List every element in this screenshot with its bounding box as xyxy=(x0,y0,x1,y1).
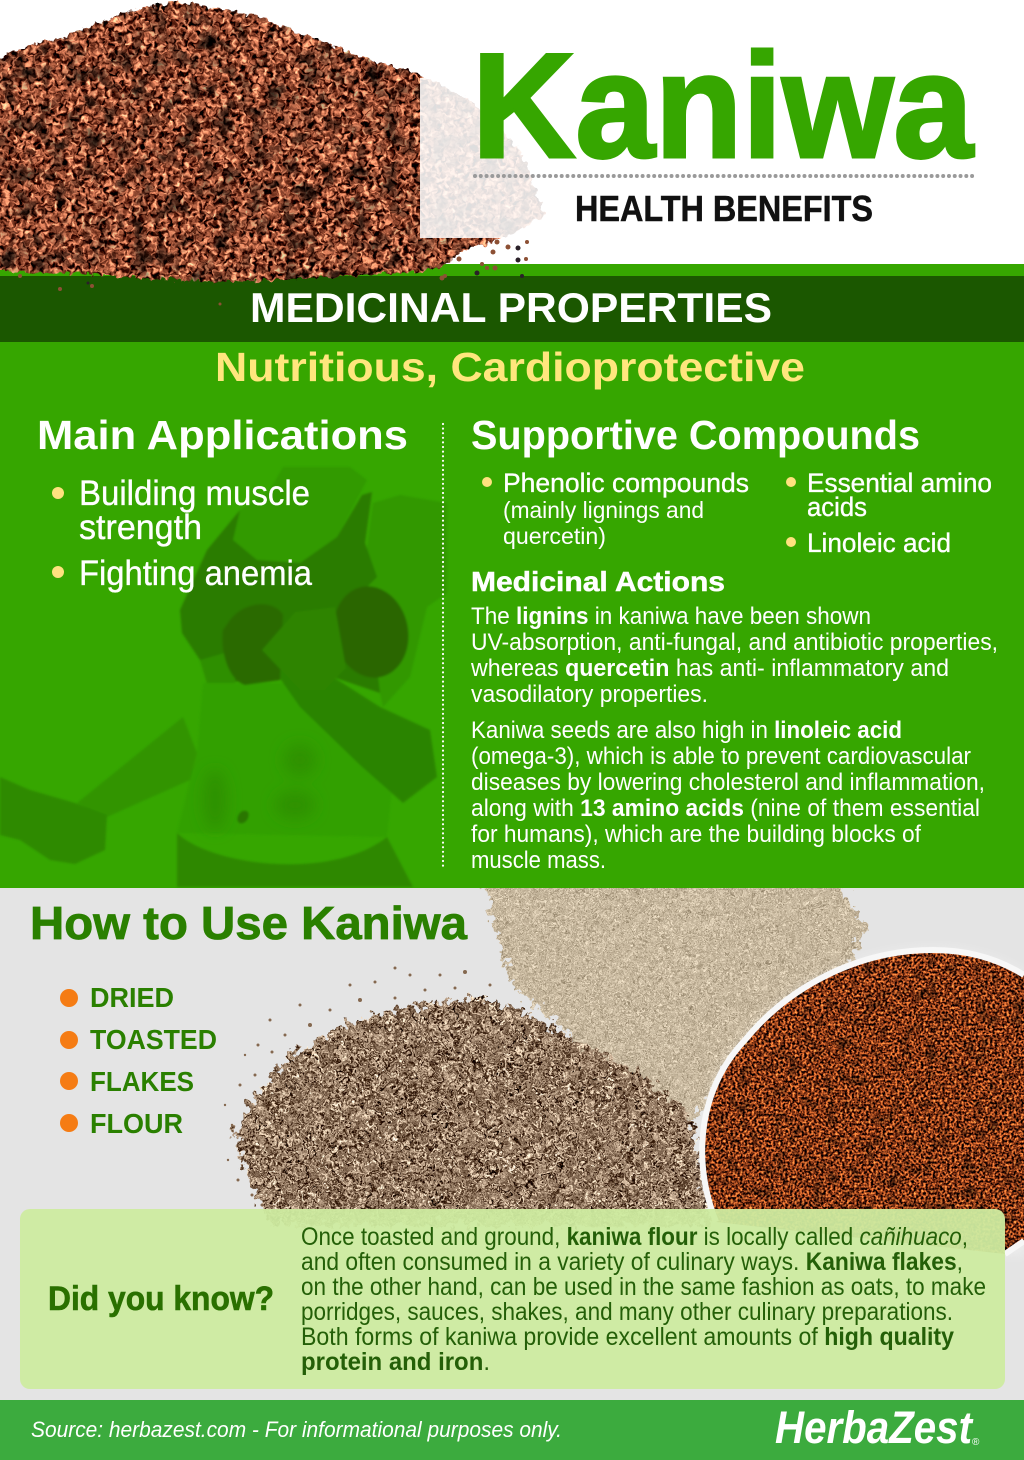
list item: essential amino acids: Essential amino xyxy=(807,468,992,498)
list item: essential amino acids: acids xyxy=(807,492,867,522)
list item: phenolic compounds: quercetin) xyxy=(503,523,606,549)
list item: phenolic compounds: (mainly lignings and xyxy=(503,497,704,523)
image: kaniwa seed pile xyxy=(0,0,546,306)
paragraph: lignins and quercetin: whereas quercetin has anti- inflammatory and xyxy=(470,655,949,682)
list item: building muscle strength xyxy=(52,474,310,547)
paragraph: linoleic acid and amino acids: muscle mass. xyxy=(471,847,606,874)
upper arm xyxy=(360,495,447,707)
list item: building muscle strength: Building muscle xyxy=(79,474,310,513)
paragraph: flour and flakes fact: protein and iron. xyxy=(301,1348,490,1376)
heading: supportive compounds: Supportive Compounds xyxy=(471,412,920,458)
paragraph: linoleic acid and amino acids: (omega-3), which is able to prevent cardiovascular xyxy=(471,743,971,770)
navel xyxy=(235,808,251,826)
list item: toasted: TOASTED xyxy=(90,1024,217,1055)
image: flakes pile xyxy=(224,966,720,1230)
panel: did you know xyxy=(20,1209,1005,1389)
source note: Source: herbazest.com - For informational purposes only. xyxy=(31,1417,562,1442)
image: flour pile xyxy=(480,888,869,1120)
subheading: nutritious, cardioprotective: Nutritious, Cardioprotective xyxy=(215,344,805,390)
forearm xyxy=(267,660,437,803)
dotted title divider xyxy=(475,174,975,178)
heading band background: medicinal properties xyxy=(0,276,1024,342)
heading: medicinal properties: MEDICINAL PROPERTIES xyxy=(250,284,772,331)
panel: main applications xyxy=(37,412,408,593)
paragraph: linoleic acid and amino acids: for humans), which are the building blocks of xyxy=(471,821,921,848)
header band: green stripe xyxy=(0,264,1024,276)
paragraph: flour and flakes fact: porridges, sauces, shakes, and many other culinary preparations. xyxy=(301,1298,953,1326)
left arm xyxy=(77,717,197,817)
section: medicinal properties background xyxy=(0,342,1024,888)
paragraph: flour and flakes fact: Once toasted and ground, kaniwa flour is locally called cañihuaco, xyxy=(301,1223,968,1251)
heading: did you know: Did you know? xyxy=(48,1280,274,1318)
list item: dried: DRIED xyxy=(90,982,174,1013)
list item: building muscle strength: strength xyxy=(79,508,202,547)
bra xyxy=(180,492,380,693)
panel: medicinal actions xyxy=(470,566,998,874)
heading: medicinal actions: Medicinal Actions xyxy=(471,566,725,597)
paragraph: linoleic acid and amino acids xyxy=(471,717,985,874)
footer xyxy=(0,1400,1024,1460)
list item: phenolic compounds: Phenolic compounds xyxy=(503,468,749,498)
torso xyxy=(177,683,393,837)
paragraph: flour and flakes fact: and often consumed in a variety of culinary ways. Kaniwa flakes, xyxy=(301,1248,963,1276)
paragraph: linoleic acid and amino acids: along with 13 amino acids (nine of them essential xyxy=(471,795,980,822)
heading: main applications: Main Applications xyxy=(37,412,408,458)
section: how to use background xyxy=(0,888,1024,1400)
paragraph: linoleic acid and amino acids: Kaniwa seeds are also high in linoleic acid xyxy=(471,717,902,744)
paragraph: linoleic acid and amino acids: diseases by lowering cholesterol and inflammation, xyxy=(471,769,985,796)
bra band xyxy=(200,650,235,683)
hand xyxy=(262,607,346,690)
paragraph: lignins and quercetin: UV-absorption, anti-fungal, and antibiotic properties, xyxy=(471,629,998,656)
paragraph: lignins and quercetin: The lignins in kaniwa have been shown xyxy=(471,603,871,630)
image: kaniwa flour, flakes and seed bowl xyxy=(224,870,1024,1260)
subtitle: health benefits: HEALTH BENEFITS xyxy=(575,188,873,229)
heading: how to use kaniwa: How to Use Kaniwa xyxy=(30,897,467,949)
paragraph: flour and flakes fact xyxy=(301,1223,986,1376)
neck and chest xyxy=(233,467,367,563)
paragraph: lignins and quercetin xyxy=(470,603,998,708)
paragraph: flour and flakes fact: Both forms of kaniwa provide excellent amounts of high quality xyxy=(301,1323,954,1351)
logo: HerbaZest: HerbaZest xyxy=(775,1402,974,1453)
white veil over pile behind title xyxy=(420,78,1024,238)
list: ways to use kaniwa xyxy=(60,982,217,1139)
list item: fighting anemia: Fighting anemia xyxy=(79,554,312,593)
logo: HerbaZest: ® xyxy=(972,1437,980,1448)
dumbbell left xyxy=(222,604,283,685)
list item: flakes: FLAKES xyxy=(90,1066,194,1097)
list item: phenolic compounds xyxy=(482,468,749,549)
title: Kaniwa: Kaniwa xyxy=(472,22,974,189)
dumbbell right xyxy=(325,579,417,685)
list item: flour: FLOUR xyxy=(90,1108,183,1139)
list item: essential amino acids xyxy=(786,468,992,522)
shorts xyxy=(177,833,413,887)
panel: supportive compounds xyxy=(471,412,992,558)
dotted column divider xyxy=(442,424,444,870)
list item: linoleic acid: Linoleic acid xyxy=(807,528,951,558)
abdominal shading xyxy=(203,744,316,830)
paragraph: lignins and quercetin: vasodilatory properties. xyxy=(471,681,708,708)
image: bowl of kaniwa seeds xyxy=(695,945,1024,1260)
left fist xyxy=(0,777,107,864)
illustration: athlete lifting dumbbell silhouette xyxy=(0,467,447,887)
